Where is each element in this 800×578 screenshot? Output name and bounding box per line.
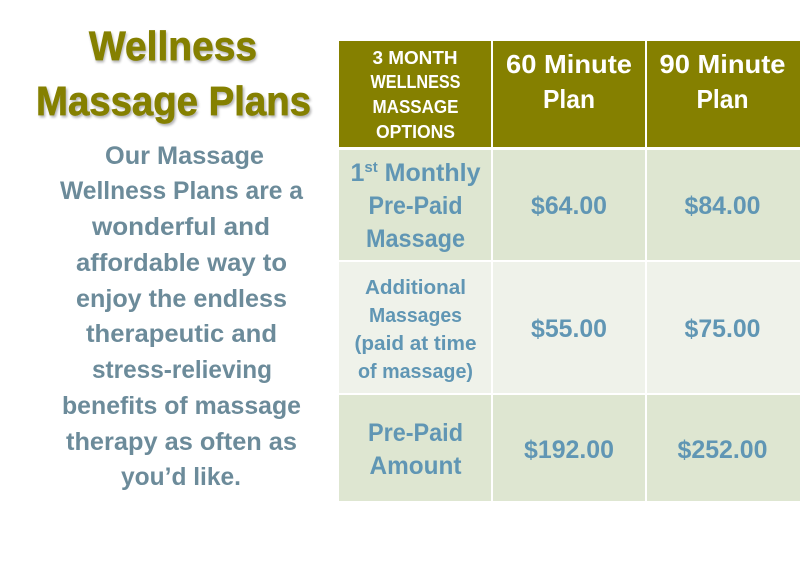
row: 1st monthly pre-paid massage: 1 bbox=[350, 159, 364, 187]
row: pre-paid amount: $252.00 bbox=[678, 436, 768, 464]
text block: description: enjoy the endless bbox=[76, 285, 287, 313]
row: pre-paid amount: $192.00 bbox=[524, 436, 614, 464]
row: 1st monthly pre-paid massage: Monthly bbox=[378, 159, 481, 187]
row: additional massages: $55.00 bbox=[531, 315, 607, 343]
text block: description bbox=[60, 142, 304, 491]
table header row: 60 Minute bbox=[506, 49, 632, 79]
title: Wellness bbox=[89, 23, 257, 69]
table header row: OPTIONS bbox=[376, 122, 455, 142]
text block: description: affordable way to bbox=[76, 249, 287, 277]
row: additional massages: (paid at time bbox=[354, 333, 476, 355]
table header row: MASSAGE bbox=[372, 97, 458, 117]
row: 1st monthly pre-paid massage: Massage bbox=[366, 225, 465, 253]
row: pre-paid amount: Amount bbox=[370, 452, 462, 480]
row: pre-paid amount bbox=[339, 395, 800, 501]
table header row: 90 Minute bbox=[660, 49, 786, 79]
pricing table bbox=[339, 41, 800, 501]
text block: description: stress-relieving bbox=[92, 356, 272, 384]
text block: description: Wellness Plans are a bbox=[60, 177, 304, 205]
title: Massage Plans bbox=[38, 80, 312, 126]
text block: description: therapy as often as bbox=[66, 428, 297, 456]
row: additional massages: Massages bbox=[369, 305, 462, 327]
row: additional massages bbox=[339, 262, 800, 393]
table header row: Plan bbox=[696, 84, 748, 114]
title: Massage Plans bbox=[36, 78, 311, 124]
table header row: 3 MONTH bbox=[372, 48, 458, 68]
row: 1st monthly pre-paid massage bbox=[339, 150, 800, 260]
text block: description: benefits of massage bbox=[62, 392, 301, 420]
text block: description: you’d like. bbox=[121, 463, 241, 491]
table header row: WELLNESS bbox=[370, 72, 460, 92]
row: additional massages: of massage) bbox=[358, 361, 473, 383]
text block: description: therapeutic and bbox=[86, 320, 277, 348]
row: pre-paid amount: Pre-Paid bbox=[368, 419, 463, 447]
row: 1st monthly pre-paid massage: $64.00 bbox=[531, 192, 607, 220]
row: additional massages: $75.00 bbox=[684, 315, 760, 343]
title: Wellness bbox=[90, 25, 258, 71]
row: 1st monthly pre-paid massage: st bbox=[364, 159, 378, 176]
row: 1st monthly pre-paid massage: Pre-Paid bbox=[368, 192, 462, 220]
table header row bbox=[339, 41, 800, 147]
row: 1st monthly pre-paid massage: $84.00 bbox=[684, 192, 760, 220]
table header row: Plan bbox=[543, 84, 595, 114]
title bbox=[36, 23, 312, 126]
text block: description: Our Massage bbox=[105, 142, 264, 170]
row: additional massages: Additional bbox=[365, 277, 466, 299]
text block: description: wonderful and bbox=[91, 213, 270, 241]
